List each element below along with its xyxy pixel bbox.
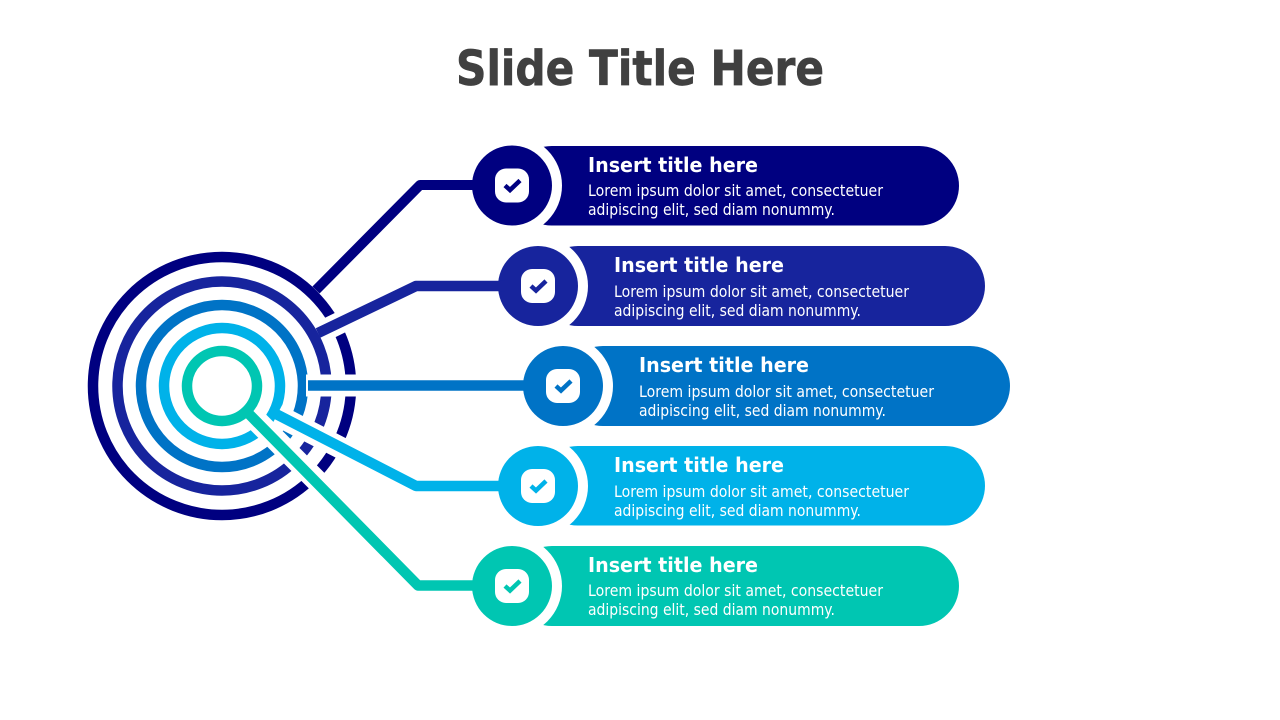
badge 1 <box>472 146 552 226</box>
badge 5 <box>472 546 552 626</box>
icon: check 3 <box>546 369 580 403</box>
badge 4 <box>498 446 578 526</box>
item 1 <box>462 136 959 236</box>
icon: check 2 <box>521 269 555 303</box>
heading 3: Insert title here <box>639 353 809 377</box>
pill 4 <box>538 446 985 526</box>
text 5: Lorem ipsum dolor sit amet, consectetuer <box>588 581 883 600</box>
item 5 <box>462 536 959 636</box>
text 2: adipiscing elit, sed diam nonummy. <box>614 301 861 320</box>
text 1: adipiscing elit, sed diam nonummy. <box>588 200 835 219</box>
concentric rings <box>93 257 351 515</box>
pill 2 <box>538 246 985 326</box>
text 1: Lorem ipsum dolor sit amet, consectetuer <box>588 181 883 200</box>
heading 1: Insert title here <box>588 153 758 177</box>
text 3: Lorem ipsum dolor sit amet, consectetuer <box>639 382 934 401</box>
badge 2 <box>498 246 578 326</box>
connector 4 <box>276 414 505 486</box>
connector 2 <box>318 286 505 333</box>
text 3: adipiscing elit, sed diam nonummy. <box>639 401 886 420</box>
pill 5 <box>512 546 959 626</box>
center ring <box>187 351 257 421</box>
item 2 <box>488 236 985 336</box>
heading 5: Insert title here <box>588 553 758 577</box>
icon: check 4 <box>521 469 555 503</box>
connector 3 <box>308 380 530 391</box>
pill 3 <box>563 346 1010 426</box>
text 4: adipiscing elit, sed diam nonummy. <box>614 501 861 520</box>
connector 1 <box>316 185 480 290</box>
target diagram with connectors <box>93 185 530 586</box>
icon: check 5 <box>495 569 529 603</box>
icon: check 1 <box>495 168 529 202</box>
title: Slide Title Here <box>456 41 824 97</box>
heading 4: Insert title here <box>614 453 784 477</box>
text 2: Lorem ipsum dolor sit amet, consectetuer <box>614 282 909 301</box>
item 3 <box>513 336 1010 436</box>
pill 1 <box>512 146 959 226</box>
item 4 <box>488 436 985 536</box>
text 4: Lorem ipsum dolor sit amet, consectetuer <box>614 482 909 501</box>
heading 2: Insert title here <box>614 253 784 277</box>
badge 3 <box>523 346 603 426</box>
connector 5 <box>249 414 480 586</box>
text 5: adipiscing elit, sed diam nonummy. <box>588 600 835 619</box>
